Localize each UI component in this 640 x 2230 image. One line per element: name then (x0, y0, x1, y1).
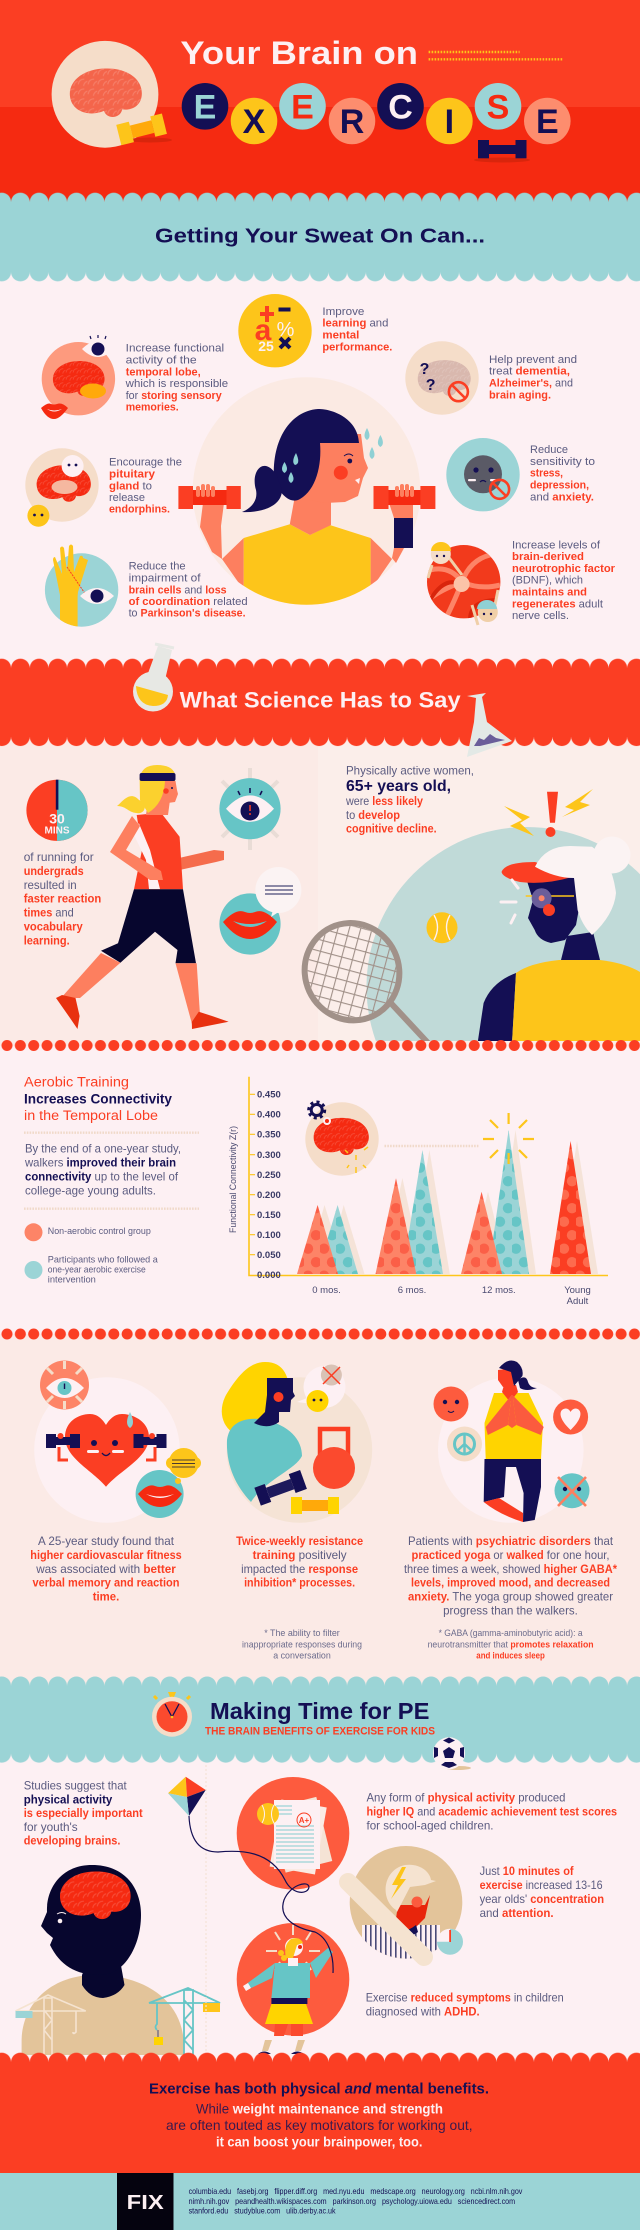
conclusion text: it can boost your brainpower, too. (216, 2134, 422, 2150)
sources list: columbia.edu fasebj.org flipper.diff.org med.nyu.edu medscape.org neurology.org ncbi.nlm.nih.gov (189, 2186, 523, 2196)
text: Parkinson's: to Parkinson's disease. (129, 608, 246, 620)
chart triangles (297, 1130, 591, 1274)
dotted title accent (429, 52, 563, 59)
icon: aging brain with question marks: ? (420, 361, 429, 378)
text: developing brains: developing brains. (24, 1834, 120, 1848)
legend: Non-aerobic control group (48, 1226, 151, 1237)
text: resistance training: impacted the response (241, 1562, 358, 1576)
icon: navy dumbbell (474, 140, 530, 162)
text: yoga study: Patients with psychiatric disorders that (408, 1534, 614, 1548)
text: yoga study: three times a week, showed higher GABA* (404, 1562, 617, 1576)
chart axes (249, 1077, 608, 1276)
footnote: GABA (428, 1628, 594, 1661)
text: yoga study: progress than the walkers. (443, 1603, 578, 1617)
panel: kids background (0, 1753, 640, 2063)
text: Parkinson's (129, 561, 248, 620)
text: running for undergrads: undergrads (24, 864, 84, 878)
text: ten minutes of exercise (480, 1864, 604, 1920)
text: temporal lobe: temporal lobe, (126, 366, 201, 378)
text: Parkinson's: of coordination related (129, 596, 248, 608)
text: 25-year study: A 25-year study found that (38, 1534, 175, 1548)
chart tick labels: 0.400 (257, 1110, 281, 1121)
icon: aging brain with question marks: ? (426, 377, 435, 394)
text: learning: mental (322, 330, 359, 342)
text: dementia (489, 354, 577, 401)
chart tick labels: 0.050 (257, 1250, 281, 1261)
icon: math symbols: % (277, 319, 295, 341)
text: developing brains (24, 1778, 143, 1848)
text: higher IQ: for school-aged children. (366, 1818, 494, 1832)
icon: stress face (446, 438, 520, 511)
section band: Making Time for PE (0, 1676, 640, 1763)
text: active women: Physically active women, (346, 763, 474, 777)
text: stress (530, 444, 595, 503)
icon: math symbols: a (255, 314, 272, 347)
text: stress: sensitivity to (530, 456, 595, 468)
text: BDNF: (BDNF), which (512, 575, 583, 587)
text: active women: cognitive decline. (346, 822, 437, 836)
footnote: response inhibition (242, 1628, 362, 1661)
icon: test papers with ball: A+ (299, 1816, 310, 1825)
chart tick labels: 0.450 (257, 1090, 281, 1101)
text: active women: 65+ years old, (346, 778, 451, 795)
illustration: heart with dumbbells (34, 1360, 201, 1523)
text: Parkinson's: impairment of (129, 572, 202, 584)
conclusion text: Exercise has both physical and mental benefits. (149, 2081, 489, 2097)
text: developing brains: for youth's (24, 1820, 78, 1834)
text: temporal lobe (125, 343, 228, 414)
divider: dots row middle (0, 1328, 640, 1340)
sources list: stanford.edu studyblue.com ulib.derby.ac.uk (189, 2206, 336, 2216)
text: 25-year study: higher cardiovascular fitness (30, 1548, 182, 1562)
legend: Participants who followed a (48, 1255, 158, 1266)
text: running for undergrads: times and (24, 906, 74, 920)
text: dementia: Alzheimer's, and (489, 378, 573, 390)
text: ten minutes of exercise: Just 10 minutes of (480, 1864, 575, 1878)
chart tick labels: 0.150 (257, 1210, 281, 1221)
text: 25-year study: was associated with better (35, 1562, 176, 1576)
text: developing brains: physical activity (24, 1792, 113, 1806)
text: higher IQ (366, 1791, 617, 1832)
text: BDNF (512, 539, 616, 622)
text: temporal lobe: memories. (126, 402, 179, 414)
icon: pituitary gland with endorphin faces (25, 448, 99, 527)
icon: math symbols (238, 294, 312, 367)
icon: soccer ball (433, 1737, 471, 1770)
icon: baseball kid (348, 1846, 463, 1965)
text: endorphins (109, 457, 182, 516)
heading: Getting Your Sweat On Can: Getting Your Sweat On Can... (155, 226, 485, 248)
text: dementia: treat dementia, (489, 366, 570, 378)
text: ten minutes of exercise: exercise increased 13-16 (480, 1878, 603, 1892)
section band: What Science Has to Say (0, 659, 640, 746)
text: BDNF: Increase levels of (512, 539, 601, 551)
icon: test papers with ball (237, 1777, 349, 1890)
icon: kite (168, 1777, 333, 1973)
text: temporal lobe: for storing sensory (126, 390, 223, 402)
illustration: yoga woman (434, 1360, 590, 1523)
chart x labels: 12 mos. (482, 1285, 516, 1296)
text: running for undergrads: faster reaction (24, 892, 101, 906)
heading: Aerobic Training: Increases Connectivity (24, 1091, 172, 1106)
text: resistance training: training positively (253, 1548, 347, 1562)
text: running for undergrads: vocabulary (24, 920, 83, 934)
title: EXERCISE letter badges: E (291, 88, 314, 126)
text: walkers study: college-age young adults. (25, 1184, 156, 1198)
heading: Aerobic Training: Aerobic Training (24, 1075, 129, 1090)
text: dementia: brain aging. (489, 389, 551, 401)
chart x labels: Adult (567, 1296, 589, 1307)
text: temporal lobe: Increase functional (126, 343, 224, 355)
text: learning: performance. (322, 342, 392, 354)
chart tick labels: 0.000 (257, 1270, 281, 1281)
icon: round flask (133, 644, 174, 712)
text: walkers study: connectivity up to the level of (25, 1170, 179, 1184)
text: BDNF: brain-derived (512, 551, 584, 563)
text: running for undergrads (24, 850, 101, 947)
text: running for undergrads: resulted in (24, 878, 77, 892)
text: running for undergrads: of running for (24, 850, 94, 864)
chart x labels: 6 mos. (398, 1285, 426, 1296)
heading: What Science Has to Say: What Science Has to Say (180, 687, 461, 712)
chart: functional connectivity (228, 1077, 608, 1307)
icon: temporal lobe brain (41, 335, 115, 419)
section band: Getting Your Sweat On (0, 193, 640, 281)
chart tick labels: 0.300 (257, 1150, 281, 1161)
panel: connectivity background (0, 1046, 640, 1334)
panel: science background (0, 737, 640, 1046)
text: stress: stress, (530, 468, 563, 480)
text: resistance training: inhibition* processes. (244, 1576, 355, 1590)
panel: sweat benefits background (0, 272, 640, 669)
text: active women (345, 763, 474, 836)
illustration: head with brain and cranes (16, 1865, 220, 2062)
footnote: response inhibition: * The ability to filter (264, 1628, 340, 1638)
text: active women: to develop (346, 808, 400, 822)
icon: stopwatch (152, 1692, 192, 1737)
illustration: runner (56, 765, 229, 1029)
text: endorphins: Encourage the (109, 457, 182, 469)
heading: Aerobic Training (24, 1075, 172, 1123)
text: dementia: Help prevent and (489, 354, 577, 366)
text: active women: were less likely (345, 794, 423, 808)
subheading: brain benefits for kids: THE BRAIN BENEFITS OF EXERCISE FOR KIDS (205, 1726, 435, 1738)
title: EXERCISE letter badges (182, 83, 571, 144)
chart tick labels: 0.200 (257, 1190, 281, 1201)
text: BDNF: regenerates adult (512, 598, 603, 610)
icon: erlenmeyer flask (467, 693, 512, 757)
panel: conclusion band (0, 2053, 640, 2174)
title: Your Brain on: Your Brain on (180, 35, 418, 71)
icon: hand and eye coordination (45, 544, 118, 628)
text: 25-year study: time. (93, 1589, 119, 1603)
chart: 30 minutes pie (26, 780, 88, 841)
chart: 30 minutes pie: 30 (49, 810, 65, 826)
header background (0, 0, 640, 203)
text: Parkinson's: brain cells and loss (129, 584, 227, 596)
icon: lips with speech bubble (219, 867, 301, 955)
icon: brain gears (305, 1102, 379, 1176)
text: Parkinson's: Reduce the (129, 561, 186, 573)
footnote: response inhibition: inappropriate responses during (242, 1639, 362, 1649)
text: yoga study: levels, improved mood, and decreased (411, 1576, 610, 1590)
heading: Making Time for PE: Making Time for PE (210, 1698, 429, 1724)
heading: Aerobic Training: in the Temporal Lobe (24, 1108, 158, 1123)
text: BDNF: maintains and (512, 587, 587, 599)
text: ten minutes of exercise: year olds' concentration (480, 1892, 604, 1906)
text: endorphins: gland to (109, 480, 152, 492)
text: ADHD: diagnosed with ADHD. (366, 2005, 480, 2019)
text: BDNF: neurotrophic factor (512, 563, 616, 575)
text: ten minutes of exercise: and attention. (480, 1906, 554, 1920)
text: 25-year study: verbal memory and reaction (32, 1576, 180, 1590)
legend: intervention (48, 1274, 96, 1285)
chart: 30 minutes pie: MINS (44, 825, 70, 836)
illustration: older woman with tennis racket (302, 789, 640, 1041)
title: EXERCISE letter badges: E (194, 88, 216, 126)
text: ADHD: Exercise reduced symptoms in children (366, 1991, 564, 2005)
icon: brain with yellow dumbbell (52, 41, 172, 148)
chart x labels (312, 1285, 591, 1307)
conclusion text: While weight maintenance and strength (196, 2100, 443, 2116)
text: endorphins: pituitary (109, 469, 156, 481)
icon: math symbols: 25 (258, 338, 274, 354)
icon: BDNF nerve cell (427, 542, 500, 625)
text: learning (322, 306, 392, 354)
conclusion text: are often touted as key motivators for working out, (166, 2117, 473, 2133)
text: resistance training (236, 1534, 363, 1590)
text: endorphins: endorphins. (109, 504, 170, 516)
text: walkers study: By the end of a one-year study, (25, 1142, 181, 1156)
title: EXERCISE letter badges: S (487, 88, 509, 126)
icon: alert eye (219, 768, 281, 850)
chart tick labels (250, 1090, 281, 1281)
divider: dots row top (0, 1039, 640, 1052)
text: walkers study (24, 1133, 199, 1209)
chart x labels: Young (564, 1285, 591, 1296)
text: ADHD (366, 1991, 564, 2019)
footer band (0, 2173, 640, 2230)
text: higher IQ: higher IQ and academic achievement test scores (366, 1805, 617, 1819)
logo: FIX: FIX (127, 2192, 164, 2214)
chart tick labels: 0.100 (257, 1230, 281, 1241)
icon: aging brain with question marks (405, 341, 479, 415)
chart shadows (305, 1130, 598, 1274)
footnote: GABA: * GABA (gamma-aminobutyric acid): a (439, 1628, 583, 1638)
text: yoga study (404, 1534, 617, 1617)
footnote: GABA: neurotransmitter that promotes relaxation (428, 1639, 594, 1649)
text: 25-year study (30, 1534, 182, 1603)
footnote: response inhibition: a conversation (273, 1651, 331, 1661)
text: learning: learning and (322, 318, 388, 330)
title: EXERCISE letter badges: R (340, 103, 364, 141)
text: running for undergrads: learning. (24, 933, 70, 947)
text: resistance training: Twice-weekly resistance (236, 1534, 363, 1548)
icon: sunburst over peak (483, 1113, 534, 1164)
title: EXERCISE letter badges: E (536, 103, 559, 141)
title: EXERCISE letter badges: C (388, 88, 413, 126)
text: yoga study: anxiety. The yoga group showed greater (408, 1589, 613, 1603)
conclusion text (149, 2081, 489, 2150)
text: walkers study: walkers improved their brain (24, 1156, 176, 1170)
text: learning: Improve (322, 306, 364, 318)
divider: dotted vertical (205, 1765, 207, 2055)
text: developing brains: is especially important (24, 1806, 143, 1820)
text: yoga study: practiced yoga or walked for one hour, (412, 1548, 610, 1562)
text: developing brains: Studies suggest that (24, 1778, 127, 1792)
dotted connector (384, 1145, 478, 1147)
legend (24, 1223, 158, 1285)
text: stress: Reduce (530, 444, 568, 456)
icon: girl with kite string (237, 1923, 349, 2054)
text: temporal lobe: which is responsible (125, 378, 228, 390)
panel: three studies background (0, 1334, 640, 1689)
chart tick labels: 0.350 (257, 1130, 281, 1141)
chart y-axis title: Functional Connectivity Z(r) (228, 1126, 239, 1233)
legend: one-year aerobic exercise (48, 1265, 146, 1276)
sources list (189, 2186, 523, 2216)
text: temporal lobe: activity of the (126, 354, 197, 366)
title: EXERCISE letter badges: X (243, 103, 266, 141)
sources list: nimh.nih.gov peandhealth.wikispaces.com parkinson.org psychology.uiowa.edu sciencedirect.com (189, 2196, 515, 2206)
illustration: woman with kettlebell (222, 1362, 372, 1523)
title: EXERCISE letter badges: I (445, 103, 454, 141)
text: endorphins: release (109, 492, 145, 504)
text: stress: and anxiety. (530, 491, 594, 503)
chart x labels: 0 mos. (312, 1285, 341, 1296)
illustration: woman lifting dumbbells (178, 377, 435, 620)
footnote: GABA: and induces sleep (476, 1651, 545, 1661)
logo: FIX (117, 2173, 174, 2230)
text: higher IQ: Any form of physical activity produced (366, 1791, 566, 1805)
chart tick labels: 0.250 (257, 1170, 281, 1181)
text: BDNF: nerve cells. (512, 610, 569, 622)
text: stress: depression, (530, 480, 589, 492)
